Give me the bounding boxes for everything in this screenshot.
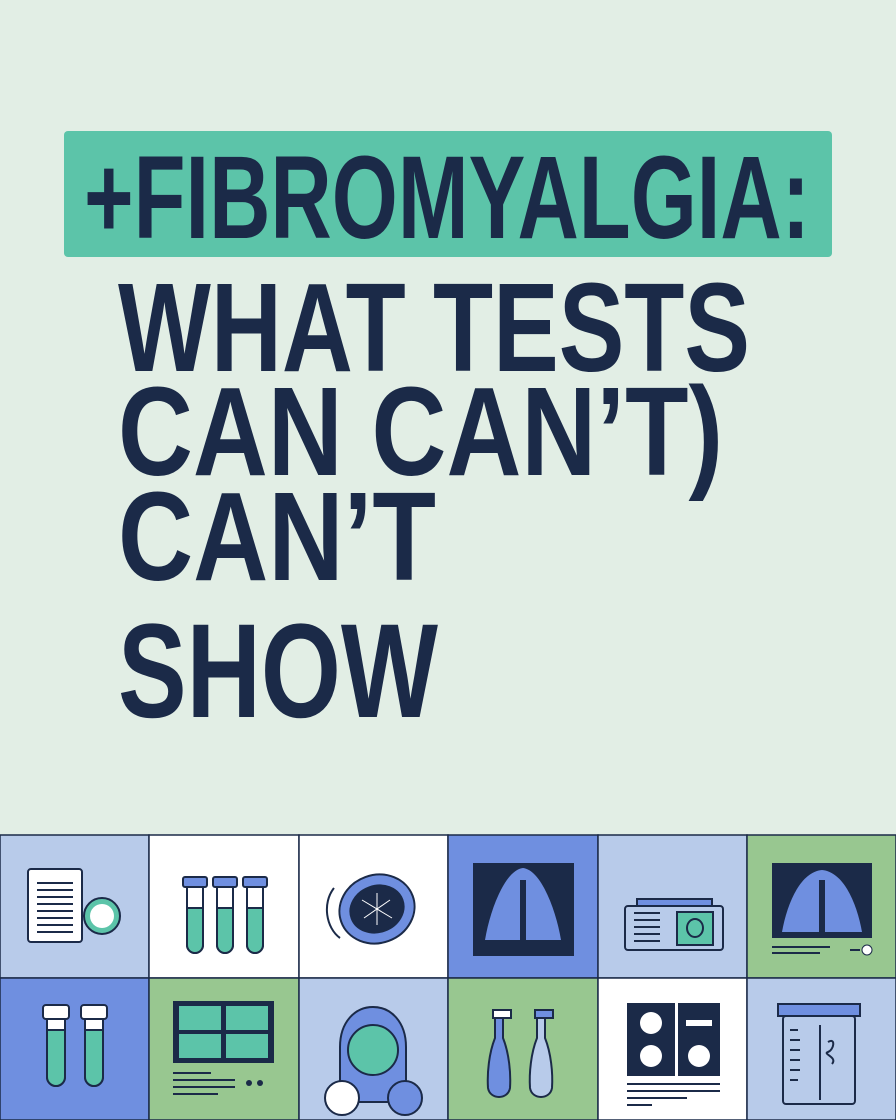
headline bbox=[118, 257, 750, 746]
icon: jar bbox=[778, 1004, 860, 1104]
icon: flasks bbox=[488, 1010, 553, 1097]
headline: CAN CAN’T) bbox=[118, 361, 723, 502]
icon grid bbox=[0, 835, 896, 1120]
icon: document with card bbox=[625, 899, 723, 950]
icon: x-ray pair bbox=[627, 1003, 720, 1105]
icon: report with lens bbox=[28, 869, 120, 942]
headline: CAN’T bbox=[118, 466, 436, 607]
icon: scan panel bbox=[173, 1001, 274, 1094]
icon: eye scan bbox=[327, 864, 424, 954]
icon: two tubes bbox=[43, 1005, 107, 1086]
icon: person bbox=[325, 1007, 422, 1115]
icon: x-ray with caption bbox=[772, 863, 872, 955]
headline: SHOW bbox=[118, 597, 438, 746]
icon: chest x-ray bbox=[473, 863, 574, 956]
icon: three test tubes bbox=[183, 877, 267, 953]
